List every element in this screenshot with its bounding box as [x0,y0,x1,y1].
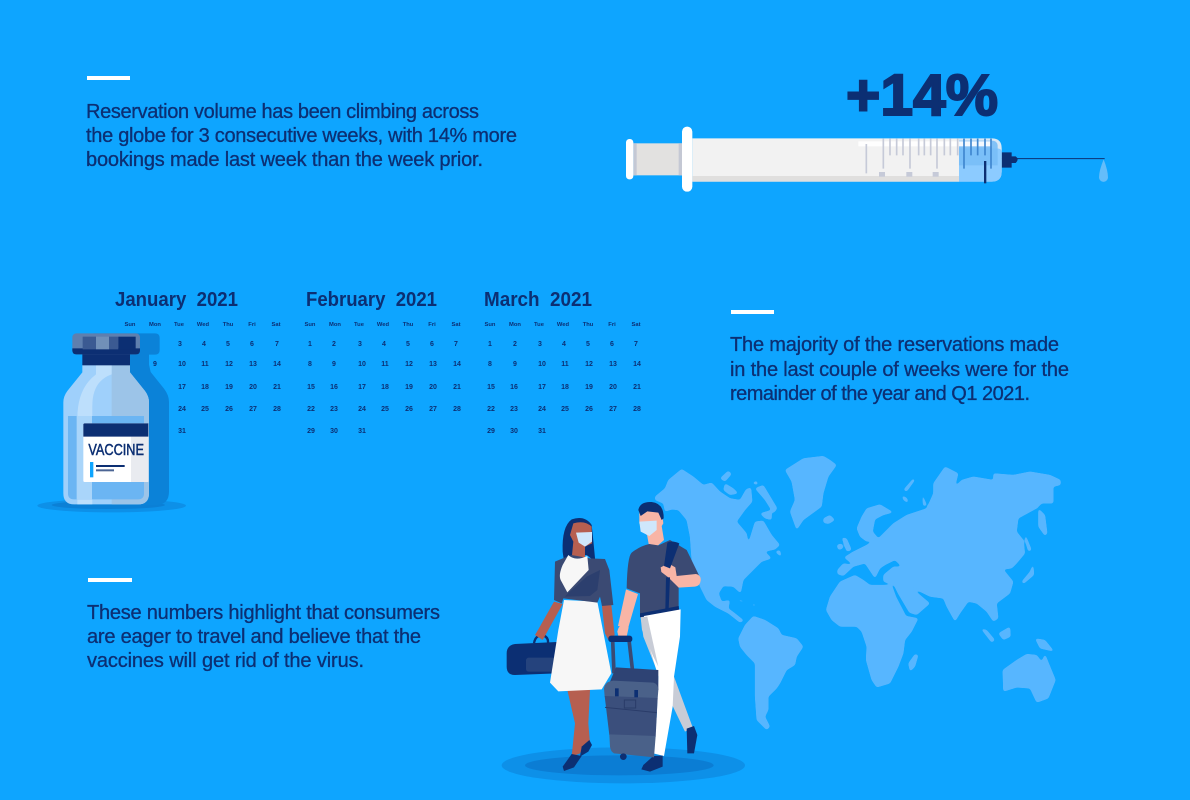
man's front leg, white trousers [644,609,681,756]
calendar: January 2021: Tue [174,322,185,328]
calendar: March 2021: March 2021 [484,289,592,311]
calendar: January 2021: 28 [273,406,281,413]
calendar: January 2021: Fri [248,322,256,328]
calendar: January 2021: 2 [153,341,157,348]
calendar: January 2021: 1 [128,341,132,348]
woman's white top and blouse [554,555,613,606]
woman's arms [535,602,563,640]
calendar: February 2021: 3 [358,341,362,348]
text block: reservation volume: the globe for 3 consecutive weeks, with 14% more [86,125,517,147]
duffel bag [507,635,557,675]
text block: majority of reservations: remainder of the year and Q1 2021. [730,383,1030,405]
calendar: January 2021: 3 [178,341,182,348]
calendar: January 2021: 7 [275,341,279,348]
big number: +14%: +14% [846,63,998,128]
calendar: February 2021: 8 [308,361,312,368]
calendar: January 2021: 26 [225,406,233,413]
calendar: January 2021: 10 [178,361,186,368]
text block: majority of reservations: The majority of the reservations made [730,334,1059,356]
calendar: January 2021: Thu [223,322,234,328]
calendar: February 2021: 22 [307,406,315,413]
calendar: March 2021: Sat [631,322,641,328]
calendar: March 2021: 3 [538,341,542,348]
icon: syringe [626,127,1108,192]
text block: majority of reservations [730,310,1069,405]
calendar: January 2021: 29 [127,428,135,435]
calendar: January 2021: 16 [150,384,158,391]
calendar: March 2021: Tue [534,322,545,328]
calendar: February 2021: 23 [330,406,338,413]
woman's legs and shoes [563,690,592,771]
text block: consumers eager to travel: These numbers highlight that consumers [87,602,440,624]
calendar: March 2021: 16 [510,384,518,391]
man's hand [617,624,629,637]
ground shadow [502,747,745,783]
text block: consumers eager to travel [87,578,440,672]
icon: vaccine vial [37,333,186,512]
calendar: January 2021: 11 [201,361,209,368]
calendar: February 2021: 7 [454,341,458,348]
calendar: February 2021: 10 [358,361,366,368]
calendar: February 2021: Wed [377,322,390,328]
calendar: January 2021: 19 [225,384,233,391]
calendar: March 2021: 19 [585,384,593,391]
calendar: February 2021: 2 [332,341,336,348]
calendar: February 2021 [305,289,461,435]
text block: majority of reservations: in the last couple of weeks were for the [730,359,1069,381]
calendar: January 2021: Wed [197,322,210,328]
calendar: March 2021: 5 [586,341,590,348]
calendar: February 2021: Sat [451,322,461,328]
calendar: January 2021: 27 [249,406,257,413]
calendar: March 2021: 6 [610,341,614,348]
man's back leg [641,614,693,732]
calendar: February 2021: 26 [405,406,413,413]
calendar: March 2021: 8 [488,361,492,368]
calendar: March 2021: Thu [583,322,594,328]
calendar: February 2021: 27 [429,406,437,413]
calendar: January 2021: Sun [125,322,136,328]
calendar: March 2021: 1 [488,341,492,348]
calendar: January 2021: 5 [226,341,230,348]
text block: reservation volume: Reservation volume has been climbing across [86,101,479,123]
text block: consumers eager to travel: are eager to travel and believe that the [87,626,421,648]
calendar: January 2021: 8 [128,361,132,368]
text block: reservation volume [86,76,517,171]
calendar: January 2021: 24 [178,406,186,413]
calendar: January 2021: 4 [202,341,206,348]
calendar: February 2021: Thu [403,322,414,328]
calendar: March 2021: 30 [510,428,518,435]
calendar: February 2021: 9 [332,361,336,368]
calendar: January 2021: 21 [273,384,281,391]
calendar: March 2021: 20 [609,384,617,391]
calendar: March 2021: 13 [609,361,617,368]
calendar: February 2021: 28 [453,406,461,413]
calendar: March 2021: 11 [561,361,569,368]
calendar: March 2021: 26 [585,406,593,413]
calendar: March 2021: 12 [585,361,593,368]
calendar: March 2021: 27 [609,406,617,413]
calendar: March 2021: 2 [513,341,517,348]
calendar: February 2021: 20 [429,384,437,391]
calendar: March 2021: 28 [633,406,641,413]
calendar: January 2021: 30 [150,428,158,435]
woman's head and hair [563,518,595,562]
calendar: January 2021: 13 [249,361,257,368]
calendar: March 2021: 29 [487,428,495,435]
calendar: February 2021: Tue [354,322,365,328]
calendar: March 2021: 24 [538,406,546,413]
calendar: February 2021: Sun [305,322,316,328]
calendar: February 2021: 11 [381,361,389,368]
calendar: January 2021: January 2021 [115,289,238,311]
man's torso and arms [618,526,701,627]
calendar: January 2021 [115,289,281,435]
calendar: January 2021: 15 [127,384,135,391]
icon: vaccine vial: VACCINE [88,442,144,459]
calendar: January 2021: Mon [149,322,161,328]
calendar: March 2021: 10 [538,361,546,368]
calendar: January 2021: 22 [127,406,135,413]
calendar: January 2021: Sat [271,322,281,328]
calendar: January 2021: 20 [249,384,257,391]
calendar: January 2021: 14 [273,361,281,368]
calendar: January 2021: 12 [225,361,233,368]
calendar: March 2021: 23 [510,406,518,413]
calendar: March 2021: Sun [485,322,496,328]
man's head and mask [638,502,664,537]
calendar: February 2021: 4 [382,341,386,348]
text block: reservation volume: bookings made last week than the week prior. [86,149,483,171]
calendar: March 2021: 18 [561,384,569,391]
calendar: February 2021: 24 [358,406,366,413]
calendar: January 2021: 17 [178,384,186,391]
calendar: January 2021: 25 [201,406,209,413]
calendar: February 2021: 14 [453,361,461,368]
suitcase [604,636,658,760]
calendar: March 2021: 14 [633,361,641,368]
calendar: March 2021: Fri [608,322,616,328]
calendar: February 2021: Mon [329,322,341,328]
calendar: March 2021: 15 [487,384,495,391]
calendar: February 2021: February 2021 [306,289,437,311]
calendar: February 2021: 19 [405,384,413,391]
calendar: February 2021: 6 [430,341,434,348]
calendar: March 2021 [484,289,641,435]
calendar: March 2021: Mon [509,322,521,328]
calendar: January 2021: 18 [201,384,209,391]
calendar: February 2021: 25 [381,406,389,413]
calendar: March 2021: 25 [561,406,569,413]
calendar: February 2021: 17 [358,384,366,391]
calendar: March 2021: 31 [538,428,546,435]
calendar: February 2021: 15 [307,384,315,391]
calendar: January 2021: 31 [178,428,186,435]
calendar: January 2021: 6 [250,341,254,348]
calendar: January 2021: 9 [153,361,157,368]
calendar: February 2021: 5 [406,341,410,348]
calendar: February 2021: 29 [307,428,315,435]
world map [655,456,1061,730]
calendar: February 2021: 31 [358,428,366,435]
calendar: March 2021: 7 [634,341,638,348]
calendar: March 2021: 21 [633,384,641,391]
calendar: February 2021: 13 [429,361,437,368]
illustration: travelling couple [502,502,745,783]
calendar: March 2021: 4 [562,341,566,348]
calendar: February 2021: 1 [308,341,312,348]
text block: consumers eager to travel: vaccines will get rid of the virus. [87,650,364,672]
calendar: February 2021: 18 [381,384,389,391]
calendar: February 2021: 12 [405,361,413,368]
calendar: March 2021: Wed [557,322,570,328]
calendar: March 2021: 22 [487,406,495,413]
calendar: March 2021: 17 [538,384,546,391]
calendar: February 2021: 16 [330,384,338,391]
calendar: February 2021: 21 [453,384,461,391]
woman's skirt [550,600,611,691]
calendar: January 2021: 23 [150,406,158,413]
calendar: March 2021: 9 [513,361,517,368]
calendar: February 2021: Fri [428,322,436,328]
calendar: February 2021: 30 [330,428,338,435]
